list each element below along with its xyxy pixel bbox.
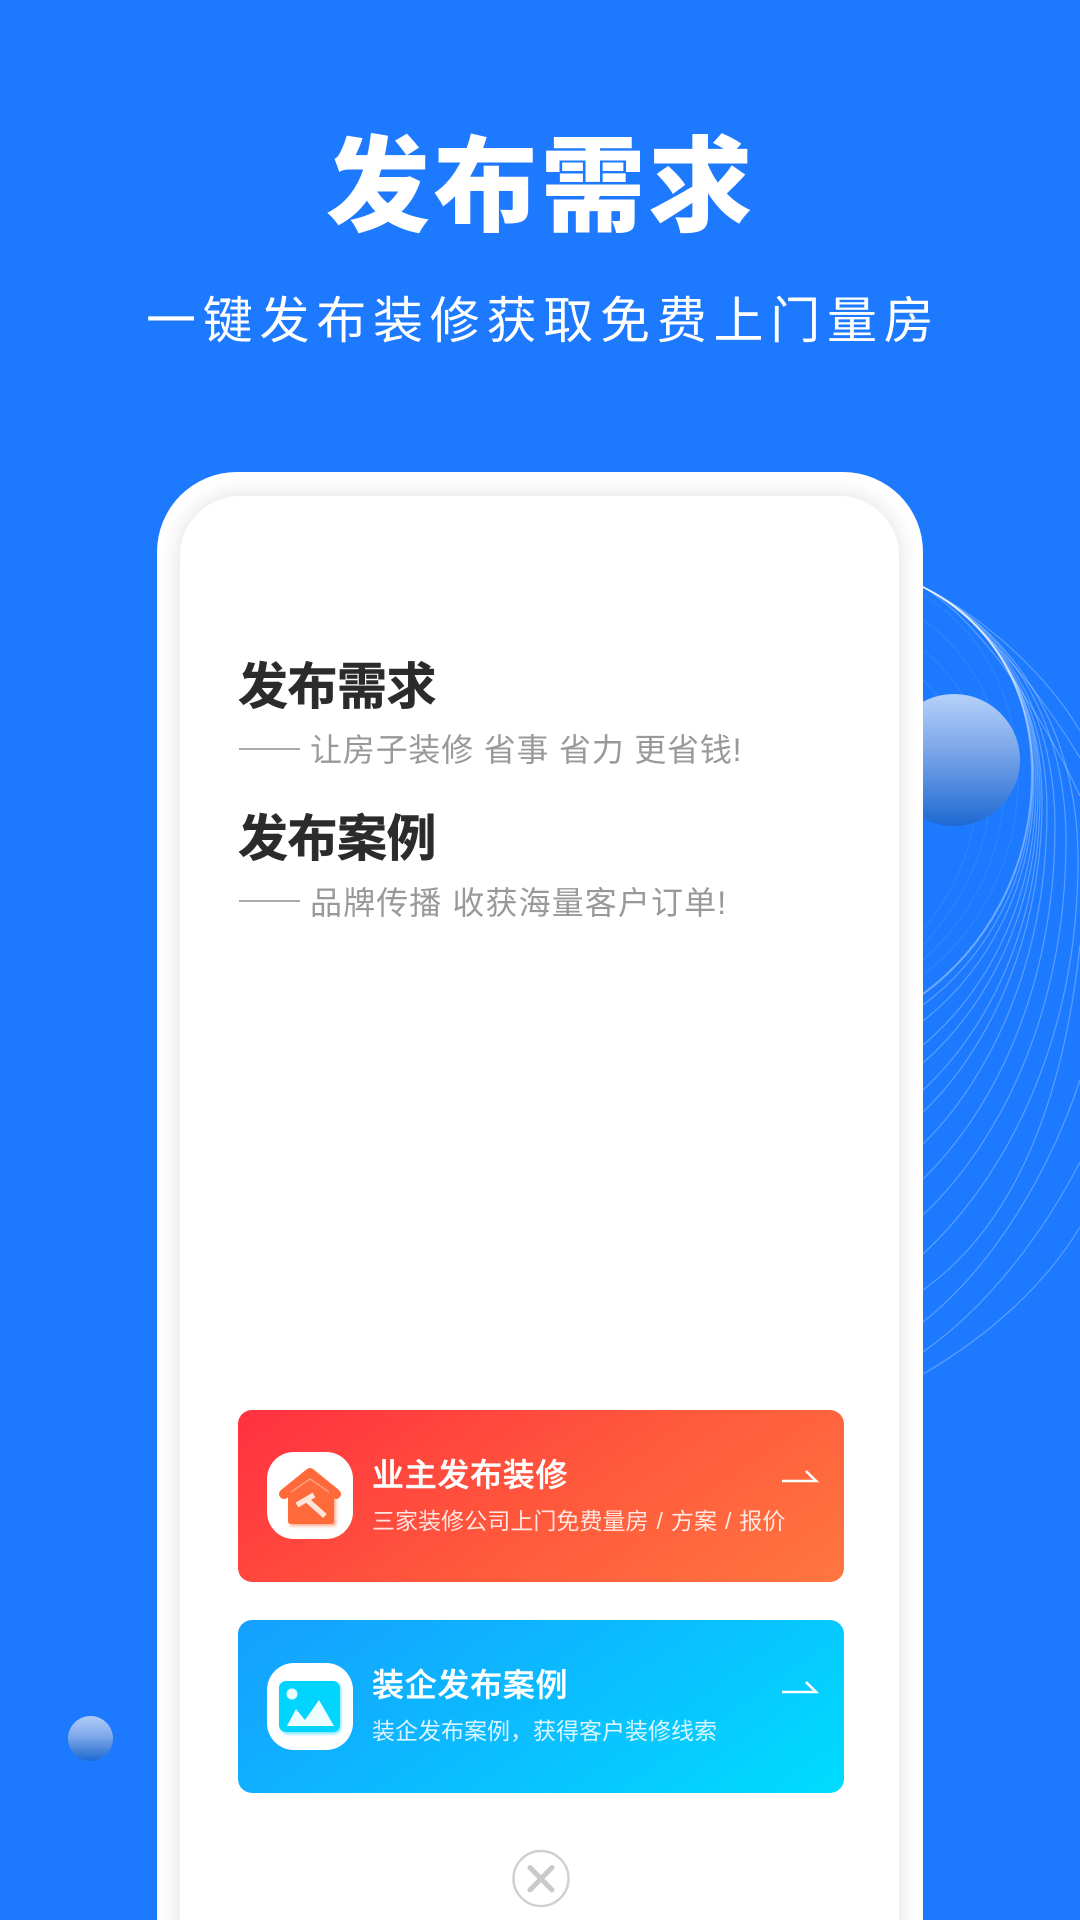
- panel: phone frame: [157, 472, 923, 1920]
- large sphere: [888, 694, 1020, 826]
- icon: close button: [512, 1850, 570, 1908]
- card title: 业主发布装修: [372, 1457, 568, 1493]
- heading: publish demand: 发布需求: [238, 659, 436, 715]
- panel: owner publish card: [238, 1410, 844, 1582]
- title: 发布需求: [326, 130, 756, 246]
- text: cases tagline: 品牌传播 收获海量客户订单!: [310, 885, 727, 921]
- small sphere: [68, 1716, 113, 1761]
- card subtitle: 三家装修公司上门免费量房 / 方案 / 报价: [372, 1508, 785, 1534]
- heading: publish cases: 发布案例: [238, 811, 436, 867]
- arrow: [782, 1470, 819, 1482]
- dash line 1: [239, 748, 300, 750]
- subtitle: 一键发布装修获取免费上门量房: [146, 293, 940, 349]
- arrow: [782, 1681, 819, 1694]
- card title: 装企发布案例: [372, 1667, 568, 1703]
- panel: phone screen: [180, 496, 899, 1920]
- dash line 2: [239, 900, 300, 902]
- card subtitle: 装企发布案例，获得客户装修线索: [372, 1718, 717, 1744]
- text: demand tagline: 让房子装修 省事 省力 更省钱!: [310, 732, 742, 768]
- panel: company publish card: [238, 1620, 844, 1793]
- icon: image picture: [267, 1663, 353, 1750]
- icon: house with hammer: [267, 1452, 353, 1539]
